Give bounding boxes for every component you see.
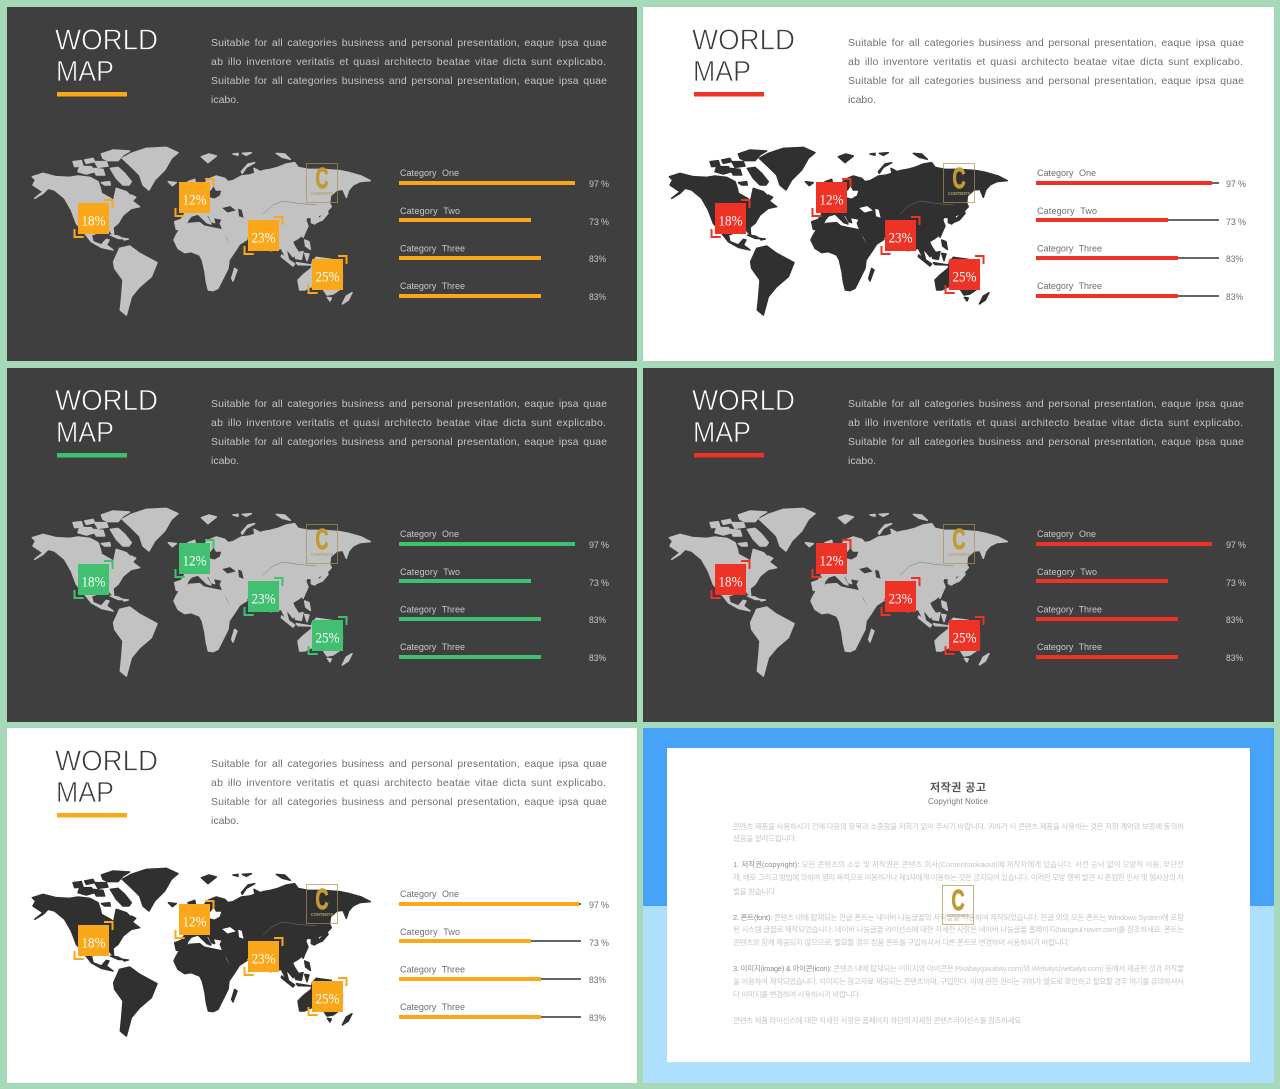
marker 12%: 12%: [820, 192, 844, 208]
bar chart: [1036, 529, 1246, 663]
notice section: font: 된 시스템 글꼴로 제작되었습니다. 네이버 나눔글꼴 라이선스에 대한 자세한 사항은 네이버 나눔글꼴 홈페이지(hangeul.naver.com)를 참조하세요. 폰트는: [733, 924, 1184, 934]
marker 18%: 18%: [718, 214, 742, 230]
marker 12%: [176, 901, 214, 938]
notice heading: 저작권 공고: [930, 780, 986, 794]
bar chart: [399, 168, 609, 302]
body text: Suitable for all categories business and personal presentation, eaque ipsa quae: [848, 398, 1244, 410]
title: WORLD: [692, 385, 795, 417]
marker 25%: [946, 617, 984, 654]
marker 25%: 25%: [952, 630, 976, 646]
bar chart: 83%: [1226, 615, 1243, 625]
notice section: font: 2. 폰트(font): 콘텐츠 내에 탑재되는 한글 폰트는 네이버 나눔글꼴의 저작물을 적용하여 제작되었습니다. 한글 외의 모든 폰트는 Windows System에 포함: [733, 912, 1184, 922]
notice section: image and icon: 다 이미지를 변경하여 사용하시기 바랍니다.: [733, 989, 861, 999]
title: [692, 385, 795, 458]
notice intro: [733, 821, 1184, 843]
marker 23%: [882, 578, 920, 615]
bar chart: 73 %: [589, 938, 609, 948]
bar chart: 73 %: [1226, 578, 1246, 588]
notice intro: 콘텐츠 제품을 사용하시기 전에 다음의 항목과 소중함을 저희가 읽어 주시기 바랍니다. 귀하가 이 콘텐츠 제품을 사용하는 것은 저희 계약과 보증에 동의하: [733, 821, 1184, 831]
bar chart: Category Two: [1037, 567, 1097, 577]
notice heading: Copyright Notice: [928, 797, 989, 806]
bar chart: 83%: [589, 254, 606, 264]
notice section: image and icon: [733, 963, 1184, 999]
title: WORLD: [55, 24, 158, 56]
bar chart: Category One: [1037, 168, 1096, 178]
marker 18%: [712, 200, 750, 237]
title: [55, 746, 158, 818]
notice section: copyright: [733, 859, 1184, 896]
body text: Suitable for all categories business and personal presentation, eaque ipsa quae: [211, 37, 607, 49]
notice section: image and icon: 을 이용하여 제작되었습니다. 이미지는 참고자료 제공되는 콘텐츠이며, 구입한다. 이에 관한 권리는 귀하가 별도로 확인하고 필요할 경우 여기를 유의하셔서: [733, 976, 1184, 986]
panel: dark orange world map: [7, 7, 637, 361]
bar chart: Category Two: [400, 206, 460, 216]
bar chart: Category One: [1037, 529, 1096, 539]
bar chart: Category Three: [1037, 604, 1102, 614]
bar chart: 73 %: [589, 217, 609, 227]
bar chart: 97 %: [589, 540, 609, 550]
bar chart: 97 %: [589, 179, 609, 189]
logo: [944, 163, 974, 202]
bar chart: Category Three: [1037, 281, 1102, 291]
title: WORLD: [55, 746, 158, 778]
notice section: font: [733, 912, 1184, 947]
body text: icabo.: [211, 455, 239, 467]
marker 18%: [74, 200, 112, 237]
bar chart: Category Three: [400, 642, 465, 652]
marker 25%: [308, 978, 346, 1015]
bar chart: 97 %: [1226, 179, 1246, 189]
body text: [211, 37, 607, 106]
body text: icabo.: [848, 455, 876, 467]
marker 23%: [244, 578, 282, 615]
body text: ab illo inventore veritatis et quasi architecto beatae vitae dicta sunt explicabo.: [848, 56, 1243, 68]
bar chart: Category One: [400, 168, 459, 178]
bar chart: 73 %: [589, 578, 609, 588]
bar chart: Category Three: [1037, 642, 1102, 652]
bar chart: 83%: [589, 1013, 606, 1023]
bar chart: 83%: [589, 292, 606, 302]
marker 12%: [812, 540, 850, 577]
body text: ab illo inventore veritatis et quasi architecto beatae vitae dicta sunt explicabo.: [211, 417, 606, 429]
marker 18%: [712, 561, 750, 598]
bar chart: [1036, 168, 1246, 302]
logo: [942, 885, 974, 924]
notice section: copyright: 1. 저작권(copyright): 모든 콘텐츠의 소유 및 저작권은 콘텐츠 회사(Contentstokaout)에 저작자에게 있습니다. 사전 승낙 없이 모방적 이용, 무단전: [733, 859, 1184, 869]
panel: white red world map: [643, 7, 1274, 361]
title: MAP: [693, 417, 751, 449]
marker 12%: [176, 540, 214, 577]
bar chart: Category Three: [400, 964, 465, 974]
logo: [306, 524, 338, 564]
bar chart: Category Three: [400, 281, 465, 291]
notice section: image and icon: 3. 이미지(image) & 아이콘(icon): 콘텐츠 내에 탑재되는 이미지와 아이콘은 Pixabay(pixabay.com)와 Webalys(webalys.com) 등에서 제공된 것과 저작물: [733, 963, 1184, 973]
bar chart: Category Two: [400, 927, 460, 937]
marker 12%: 12%: [182, 554, 206, 570]
title: WORLD: [55, 385, 158, 417]
body text: ab illo inventore veritatis et quasi architecto beatae vitae dicta sunt explicabo.: [848, 417, 1243, 429]
bar chart: Category Three: [1037, 244, 1102, 254]
notice section: copyright: 재, 배포 그리고 방법에 의하여 영리 목적으로 이용하거나 제3자에게 이용하는 것은 금지되어 있습니다. 이러한 모방 행위 발견 시 준엄한 민사 및 형사상의 처: [733, 872, 1184, 882]
logo: [306, 163, 338, 202]
notice heading: [928, 780, 989, 806]
marker 25%: [308, 256, 346, 293]
marker 18%: 18%: [718, 574, 742, 590]
body text: Suitable for all categories business and personal presentation, eaque ipsa quae: [848, 436, 1244, 448]
marker 12%: [176, 179, 214, 216]
bar chart: Category Two: [400, 567, 460, 577]
world map: [32, 868, 370, 1036]
panel: copyright notice: [643, 728, 1274, 1083]
notice intro: 셨음을 알려드립니다.: [733, 833, 797, 843]
body text: [211, 758, 607, 827]
bar chart: 83%: [1226, 254, 1243, 264]
marker 23%: [244, 938, 282, 975]
bar chart: Category Three: [400, 1002, 465, 1012]
bar chart: 83%: [1226, 292, 1243, 302]
marker 18%: 18%: [82, 214, 106, 230]
body text: ab illo inventore veritatis et quasi architecto beatae vitae dicta sunt explicabo.: [211, 777, 606, 789]
marker 23%: 23%: [252, 230, 276, 246]
marker 23%: 23%: [252, 592, 276, 608]
body text: [848, 37, 1244, 106]
title: [55, 385, 158, 458]
bar chart: 83%: [589, 975, 606, 985]
bar chart: Category Two: [1037, 206, 1097, 216]
marker 23%: 23%: [252, 952, 276, 968]
bar chart: 83%: [589, 615, 606, 625]
panel: dark red world map: [643, 368, 1274, 722]
bar chart: Category Three: [400, 244, 465, 254]
bar chart: 83%: [1226, 653, 1243, 663]
notice section: copyright: 벌을 받습니다.: [733, 886, 777, 896]
world map: [32, 508, 370, 676]
body text: Suitable for all categories business and personal presentation, eaque ipsa quae: [848, 37, 1244, 49]
body text: icabo.: [848, 94, 876, 106]
marker 23%: 23%: [888, 592, 912, 608]
world map: [32, 147, 370, 315]
notice section: font: 콘텐츠와 함께 제공되지 않으므로, 필요할 경우 정품 폰트를 구입하셔서 다른 폰트로 변경하여 사용하시기 바랍니다.: [733, 937, 1070, 947]
bar chart: 97 %: [1226, 540, 1246, 550]
panel: dark green world map: [7, 368, 637, 722]
marker 18%: 18%: [82, 936, 106, 952]
marker 12%: 12%: [820, 554, 844, 570]
world map: [669, 508, 1007, 676]
marker 25%: 25%: [316, 992, 340, 1008]
marker 12%: 12%: [182, 192, 206, 208]
body text: Suitable for all categories business and personal presentation, eaque ipsa quae: [211, 75, 607, 87]
body text: Suitable for all categories business and personal presentation, eaque ipsa quae: [848, 75, 1244, 87]
bar chart: Category One: [400, 529, 459, 539]
title: MAP: [56, 777, 114, 809]
bar chart: Category Three: [400, 604, 465, 614]
body text: Suitable for all categories business and personal presentation, eaque ipsa quae: [211, 436, 607, 448]
marker 18%: [74, 922, 112, 959]
marker 25%: 25%: [952, 270, 976, 286]
bar chart: 83%: [589, 653, 606, 663]
notice card: [667, 748, 1250, 1062]
world map: [669, 147, 1007, 315]
body text: ab illo inventore veritatis et quasi architecto beatae vitae dicta sunt explicabo.: [211, 56, 606, 68]
body text: icabo.: [211, 815, 239, 827]
marker 25%: 25%: [316, 270, 340, 286]
title: MAP: [56, 417, 114, 449]
logo: [306, 884, 338, 924]
marker 25%: 25%: [316, 630, 340, 646]
body text: [848, 398, 1244, 467]
body text: Suitable for all categories business and personal presentation, eaque ipsa quae: [211, 758, 607, 770]
body text: icabo.: [211, 94, 239, 106]
logo: [944, 524, 974, 564]
marker 12%: 12%: [182, 914, 206, 930]
marker 23%: [882, 217, 920, 254]
notice footer: 콘텐츠 제품 라이선스에 대한 자세한 사항은 홈페이지 하단의 자세한 콘텐츠라이선스를 참조하세요.: [733, 1015, 1023, 1025]
title: MAP: [693, 56, 751, 88]
bar chart: [399, 529, 609, 663]
title: MAP: [56, 56, 114, 88]
bar chart: [399, 889, 609, 1023]
marker 12%: [812, 179, 850, 216]
title: [55, 24, 158, 96]
title: [692, 24, 795, 96]
bar chart: 73 %: [1226, 217, 1246, 227]
panel: white orange world map: [7, 728, 637, 1083]
marker 18%: [74, 561, 112, 598]
marker 25%: [946, 256, 984, 293]
body text: Suitable for all categories business and personal presentation, eaque ipsa quae: [211, 796, 607, 808]
marker 25%: [308, 617, 346, 654]
marker 23%: [244, 217, 282, 254]
body text: [211, 398, 607, 467]
body text: Suitable for all categories business and personal presentation, eaque ipsa quae: [211, 398, 607, 410]
bar chart: Category One: [400, 889, 459, 899]
title: WORLD: [692, 24, 795, 56]
marker 18%: 18%: [82, 574, 106, 590]
bar chart: 97 %: [589, 900, 609, 910]
marker 23%: 23%: [888, 230, 912, 246]
